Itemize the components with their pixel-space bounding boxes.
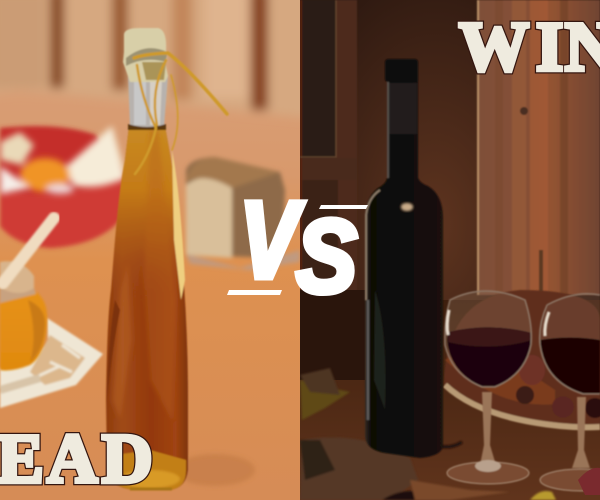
heading: VS <box>227 179 368 314</box>
mead bottle <box>106 28 255 490</box>
honey jar <box>0 261 47 370</box>
heading: VS: V <box>240 179 304 300</box>
tray with grapes <box>444 290 600 428</box>
bottom left bar <box>227 290 282 295</box>
wine bottle <box>365 59 443 458</box>
dark backdrop <box>300 0 600 300</box>
panel: wine photo <box>300 0 600 500</box>
wine glass right <box>540 294 600 491</box>
wooden plank wall <box>477 0 600 300</box>
red basket <box>0 126 126 248</box>
panel: mead photo <box>0 0 310 500</box>
wooden table <box>300 300 600 500</box>
shadow <box>186 454 254 486</box>
heading: VS: S <box>296 198 357 314</box>
wine glass left <box>445 291 532 484</box>
leaves <box>300 368 556 500</box>
wax cork <box>123 28 168 82</box>
golden ribbon <box>134 53 227 174</box>
decorative corner fruit <box>578 468 600 495</box>
glass neck <box>128 75 168 127</box>
door frame <box>300 0 358 290</box>
bottle body <box>106 126 188 490</box>
table surface <box>0 82 300 500</box>
wooden spoon handle <box>3 218 54 283</box>
coaster <box>0 318 103 408</box>
basket contents <box>0 126 126 194</box>
bread loaf <box>186 157 300 270</box>
honey jar with spoon <box>0 218 103 408</box>
top right bar <box>319 205 368 209</box>
curtain wall <box>0 0 310 118</box>
